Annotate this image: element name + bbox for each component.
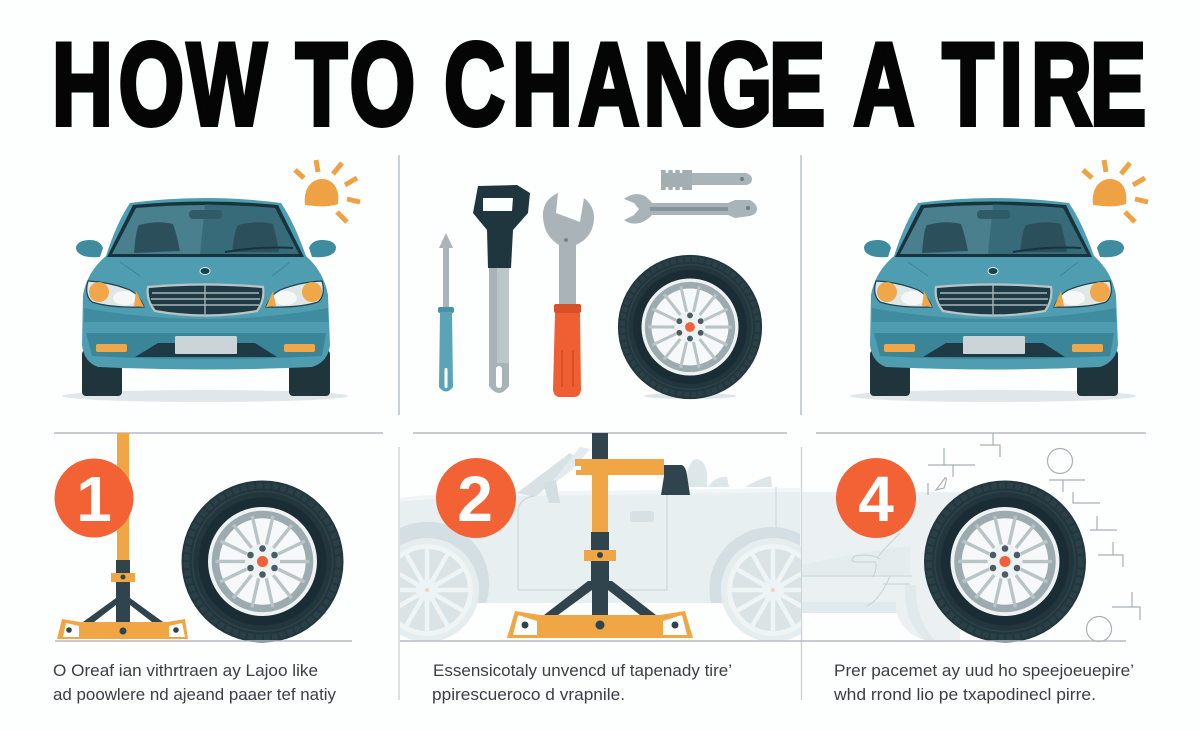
wheel [924, 480, 1086, 642]
icon: screwdriver [438, 233, 454, 392]
step number 4 [836, 458, 916, 538]
step 2 text [432, 662, 732, 704]
panel: step 2 [400, 433, 801, 704]
step number 2: 2 [457, 463, 493, 535]
step 2 text: ppirescueroco d vrapnile. [432, 686, 625, 704]
panel: tools [438, 169, 762, 399]
icon: orange handled wrench [543, 193, 594, 397]
jack [507, 433, 693, 638]
step 4 text [833, 662, 1134, 704]
sketch marks [928, 433, 1140, 642]
ground line [800, 640, 1126, 642]
title: HOW TO CHANGE A TIRE [52, 19, 1146, 150]
step 1 text: ad poowlere nd ajeand paaer tef natiy [53, 686, 337, 704]
step number 4: 4 [858, 463, 894, 535]
panel: car with sun left [62, 160, 360, 402]
icon: lug wrench [473, 185, 530, 393]
step 1 text [53, 662, 337, 704]
ghost car front [802, 492, 960, 640]
jack [57, 433, 188, 639]
ghost car [400, 447, 801, 640]
icon: threaded bolt [661, 169, 752, 191]
panel: car with sun right [850, 160, 1148, 402]
step 4 text: whd rrond lio pe txapodinecl pirre. [833, 686, 1096, 704]
step 1 text: O Oreaf ian vithrtraen ay Lajoo like [53, 662, 318, 680]
step 2 text: Essensicotaly unvencd uf tapenady tire’ [433, 662, 732, 680]
step 4 text: Prer pacemet ay uud ho speejoeuepire’ [834, 662, 1134, 680]
icon: spare tire [618, 255, 762, 399]
panel: step 4 [800, 433, 1140, 704]
wheel [182, 480, 344, 642]
step number 1 [54, 458, 134, 538]
ground line [55, 640, 352, 642]
ground line [400, 640, 800, 642]
step number 1: 1 [76, 463, 112, 535]
icon: open wrench [624, 194, 757, 224]
step number 2 [436, 458, 516, 538]
panel: step 1 [53, 433, 352, 704]
